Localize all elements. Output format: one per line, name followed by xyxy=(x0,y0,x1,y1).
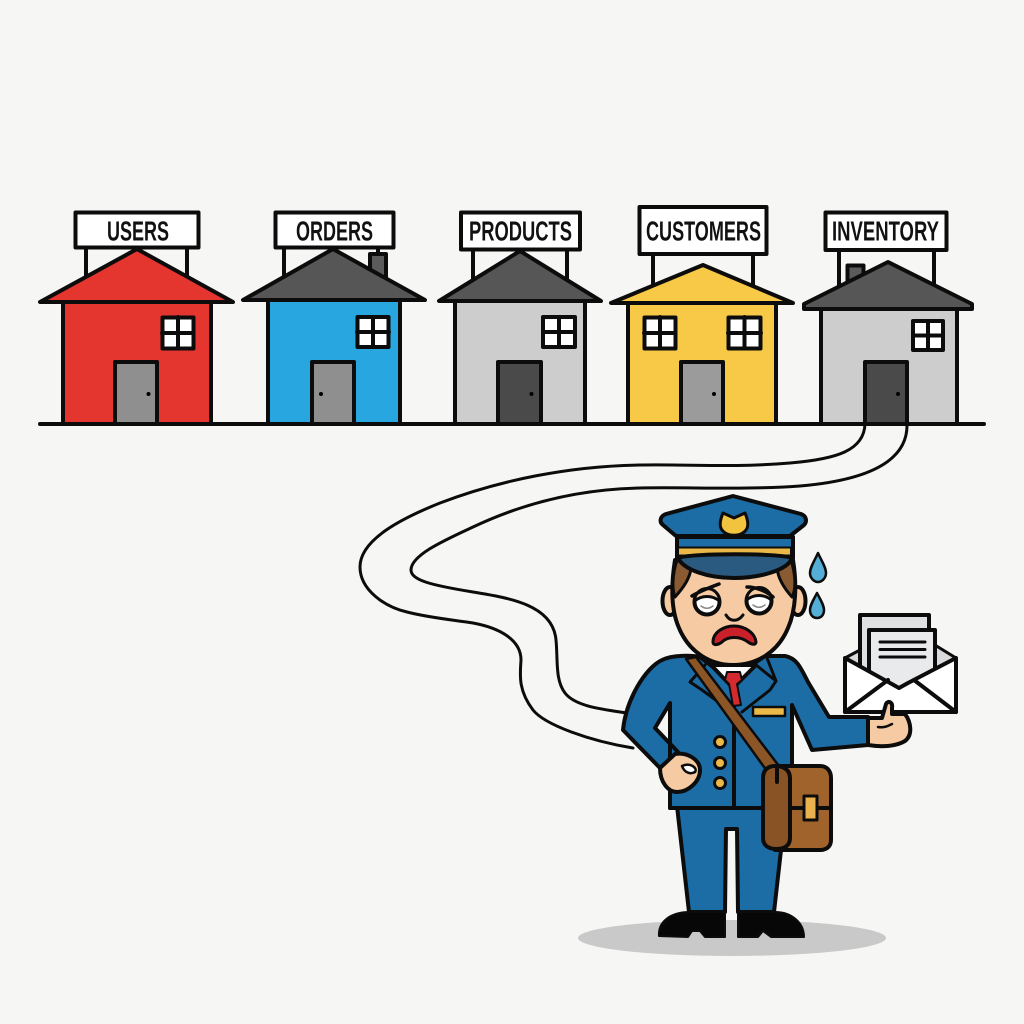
sign: users: USERS xyxy=(107,216,169,246)
eyes xyxy=(692,584,773,614)
buttons xyxy=(714,736,726,788)
postman shadow xyxy=(578,920,886,956)
shirt collar and tie xyxy=(711,665,756,688)
shoes xyxy=(659,912,804,937)
left hand xyxy=(660,754,700,792)
jacket xyxy=(623,656,868,808)
ears xyxy=(662,587,806,615)
postman xyxy=(623,496,956,937)
sign: orders xyxy=(276,212,394,248)
house: customers xyxy=(611,207,793,424)
ground line xyxy=(40,422,984,426)
winding road xyxy=(360,424,907,748)
house: orders xyxy=(243,212,425,424)
cap xyxy=(661,496,806,578)
legs xyxy=(677,806,786,912)
lapels xyxy=(690,658,776,712)
sign: products xyxy=(461,212,580,250)
mouth xyxy=(713,626,756,645)
messenger bag xyxy=(763,766,831,850)
bag strap xyxy=(686,657,782,778)
house: products xyxy=(439,212,601,424)
house: inventory xyxy=(804,212,972,424)
hair xyxy=(673,560,795,597)
sign: users xyxy=(76,212,198,248)
sign: products: PRODUCTS xyxy=(469,216,572,246)
sweat drops xyxy=(810,553,826,618)
sign: inventory xyxy=(826,212,946,250)
sign: inventory: INVENTORY xyxy=(832,216,939,246)
pocket badge xyxy=(753,707,785,716)
sign: customers: CUSTOMERS xyxy=(646,216,761,246)
nose xyxy=(726,615,743,620)
house: users xyxy=(40,212,233,424)
sign: customers xyxy=(640,207,766,254)
cap badge xyxy=(720,513,748,535)
envelope with letters xyxy=(845,615,956,712)
sign: orders: ORDERS xyxy=(296,216,373,246)
right hand xyxy=(868,702,910,746)
head xyxy=(672,560,795,665)
